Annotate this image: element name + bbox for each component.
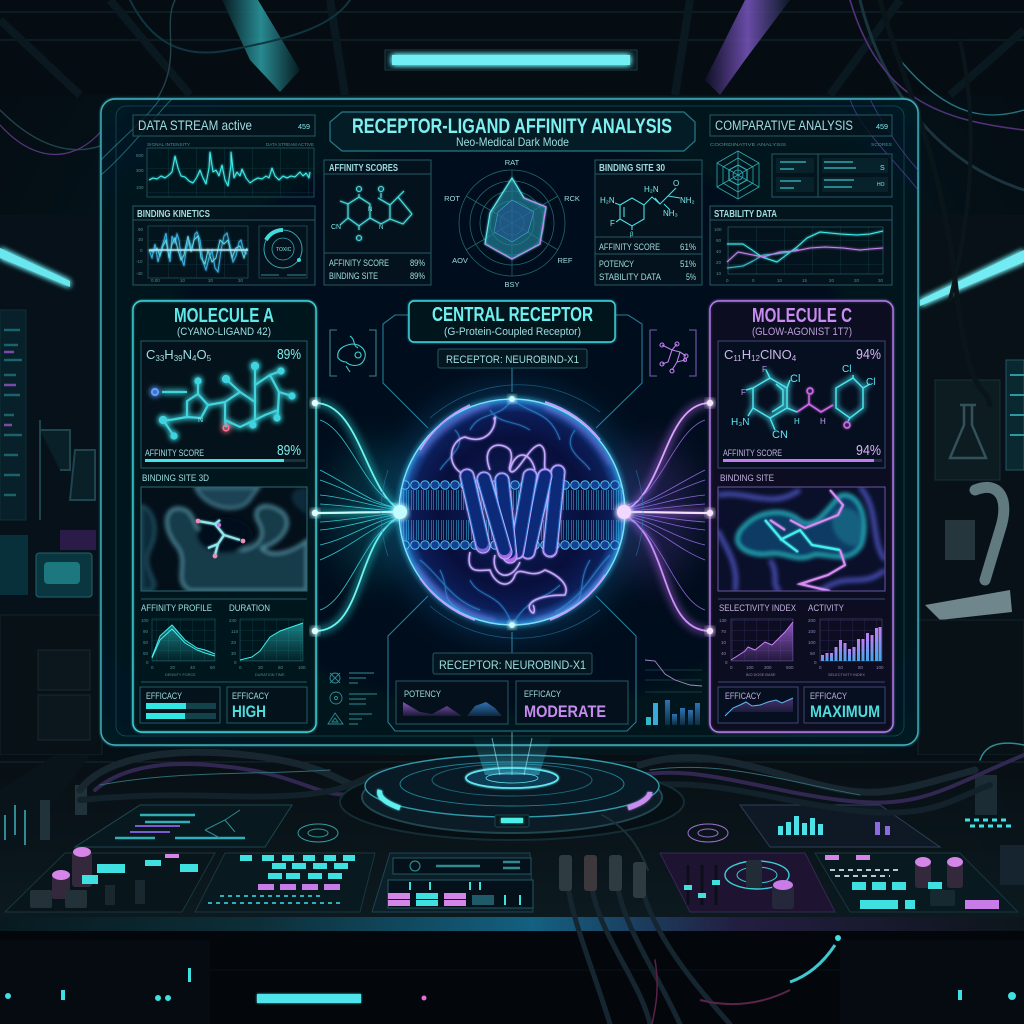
- panel: stability data: 0: [752, 278, 755, 283]
- molecule C structure box: 94%: [856, 442, 881, 459]
- lipid bilayer: [399, 480, 625, 550]
- panel: binding site 3D: NH₃: [663, 209, 678, 218]
- molecule C structure box: H: [820, 417, 826, 426]
- molecule A structure box: 89%: [277, 346, 301, 363]
- activity bar chart: 200: [808, 618, 816, 623]
- panel: stability data: 20: [829, 278, 835, 283]
- receptor label bottom: RECEPTOR: NEUROBIND-X1: [439, 658, 586, 672]
- molecule C structure box: Cl: [790, 373, 800, 385]
- efficacy high box: HIGH: [232, 702, 266, 721]
- panel: stability data: 0: [726, 278, 729, 283]
- activity bar chart: 100: [808, 629, 816, 634]
- panel: binding site 3D: STABILITY DATA: [599, 272, 661, 282]
- radar chart: BSY: [504, 280, 520, 289]
- panel: binding kinetics: 30: [238, 278, 244, 283]
- molecule A subtitle: (CYANO-LIGAND 42): [177, 326, 271, 338]
- console cables: [80, 743, 1024, 813]
- selectivity index chart: 300: [764, 665, 772, 670]
- hologram base platform: [340, 755, 684, 840]
- panel: stability data: 10: [716, 271, 722, 276]
- efficacy bars box: [140, 687, 220, 723]
- molecule C structure box: Cl: [866, 377, 875, 388]
- molecule A heading: MOLECULE A: [174, 305, 274, 327]
- panel: binding kinetics: 10: [180, 278, 186, 283]
- main holographic dashboard frame: [101, 99, 918, 745]
- hologram light beam: [472, 732, 552, 775]
- affinity profile chart: 90: [143, 629, 149, 634]
- duration chart: 30: [231, 651, 237, 656]
- console control panel: left: [5, 847, 215, 912]
- activity bar chart: [808, 603, 884, 677]
- icon: molecule purple: [650, 330, 696, 376]
- panel: stability data: 90: [716, 238, 722, 243]
- molecule C structure box: H₃N: [731, 417, 750, 428]
- ceiling with pipes and light: [0, 0, 1024, 190]
- duration chart: 0: [239, 665, 242, 670]
- mini radar: [717, 151, 759, 199]
- data stream heading: DATA STREAM active: [138, 117, 252, 133]
- molecule diagram: [340, 186, 412, 240]
- panel: data stream: DATA STREAM ACTIVE: [266, 142, 314, 147]
- molecule A structure box: O: [196, 347, 207, 362]
- molecule C structure box: F: [762, 365, 767, 374]
- molecule C structure box: Cl: [842, 364, 851, 375]
- panel: molecule C: [710, 301, 893, 732]
- duration chart: 30: [258, 665, 264, 670]
- affinity profile chart: AFFINITY PROFILE: [141, 603, 212, 614]
- binding kinetics heading: BINDING KINETICS: [137, 209, 210, 220]
- panel: stability data: 100: [714, 227, 722, 232]
- molecule A diagram: [152, 363, 294, 438]
- selectivity index chart: [719, 603, 797, 677]
- molecule C structure box: H: [794, 417, 800, 426]
- molecule A structure box: 4: [192, 354, 197, 363]
- panel: binding kinetics: 90: [138, 227, 144, 232]
- activity bar chart: SELECTIVITY INDEX: [828, 673, 865, 677]
- stability heading: STABILITY DATA: [714, 209, 777, 220]
- efficacy moderate box: EFFICACY: [524, 689, 561, 699]
- receptor label top: RECEPTOR: NEUROBIND-X1: [446, 354, 579, 366]
- selectivity index chart: 100: [746, 665, 754, 670]
- molecule C structure box: 12: [751, 354, 761, 363]
- potency box: [396, 681, 508, 724]
- binding site surface render: [718, 487, 885, 591]
- comparison mini table: [772, 154, 892, 197]
- selectivity index chart: 500: [786, 665, 794, 670]
- affinity profile chart: 50: [143, 651, 149, 656]
- panel: data stream: [133, 115, 315, 197]
- neural veins: [420, 399, 610, 625]
- duration chart: 20: [231, 640, 237, 645]
- panel: binding kinetics: 0.00: [151, 278, 160, 283]
- panel: stability data: 20: [854, 278, 860, 283]
- molecule C diagram: [746, 370, 870, 430]
- panel: comparative analysis: SCORES: [871, 142, 892, 147]
- connection streams: purple from molecule C: [615, 400, 713, 634]
- console control panel: right keypad: [815, 853, 1018, 912]
- panel: data stream: 459: [298, 122, 310, 131]
- side console modules: [0, 755, 1024, 885]
- molecule C structure box: [718, 341, 885, 468]
- molecule C structure box: C: [724, 347, 733, 362]
- console control panel: right purple: [660, 853, 835, 912]
- selectivity index chart: 130: [719, 618, 727, 623]
- binding site label: BINDING SITE 3D: [142, 473, 209, 484]
- efficacy maximum box: [804, 687, 885, 723]
- central receptor subtitle: (G-Protein-Coupled Receptor): [444, 326, 581, 338]
- panel: binding site 3D: H₂N: [644, 185, 659, 194]
- molecule C structure box: F: [741, 388, 746, 397]
- panel: binding kinetics: -40: [136, 271, 143, 276]
- activity bar chart: 100: [808, 640, 816, 645]
- affinity profile chart: 40: [190, 665, 196, 670]
- molecule C heading: MOLECULE C: [752, 305, 852, 327]
- affinity profile chart: 0: [146, 660, 149, 665]
- right side lab equipment: [880, 0, 1024, 755]
- central receptor frame lines: [383, 315, 642, 731]
- affinity profile chart: [141, 603, 216, 677]
- affinity profile chart: DENSITY FORCE: [165, 673, 196, 677]
- radar chart: AOV: [452, 256, 468, 265]
- molecule C structure box: H: [742, 347, 751, 362]
- panel: binding site 3D: NH₂: [680, 196, 695, 205]
- radar chart: RAT: [505, 158, 520, 167]
- panel: stability data: [710, 206, 892, 285]
- molecule A structure box: [141, 341, 307, 468]
- panel: binding kinetics: 0: [140, 248, 143, 253]
- panel: binding kinetics: 30: [138, 237, 144, 242]
- selectivity index chart: SELECTIVITY INDEX: [719, 603, 797, 614]
- selectivity index chart: 0: [730, 665, 733, 670]
- console screen: left: [75, 805, 292, 847]
- panel: affinity scores: [324, 160, 431, 285]
- title banner: [330, 112, 695, 151]
- affinity profile chart: 100: [141, 618, 149, 623]
- mini bar chart: [646, 700, 700, 725]
- binding site label: BINDING SITE: [720, 473, 774, 484]
- panel: stability data: 10: [777, 278, 783, 283]
- icon: brain and stethoscope: [330, 330, 376, 376]
- molecule C structure box: 4: [792, 354, 797, 363]
- efficacy high box: [227, 687, 307, 723]
- selectivity index chart: BIO DOSE BASE: [746, 673, 776, 677]
- mini trend lines: [645, 660, 702, 692]
- activity bar chart: ACTIVITY: [808, 603, 845, 614]
- molecule A structure box: 33: [155, 354, 165, 363]
- duration chart: 60: [278, 665, 284, 670]
- duration chart: 0: [234, 660, 237, 665]
- kinetics chart: [149, 232, 248, 272]
- comparison mini table: HO: [877, 182, 885, 188]
- panel: binding kinetics: [133, 206, 315, 285]
- central receptor title: CENTRAL RECEPTOR: [432, 304, 593, 326]
- activity bar chart: 50: [838, 665, 844, 670]
- affinity profile chart: 0: [151, 665, 154, 670]
- panel: stability data: 30: [878, 278, 884, 283]
- duration chart: DURATION: [229, 603, 270, 614]
- activity bar chart: 50: [810, 651, 816, 656]
- panel: binding site 3D: F: [610, 219, 615, 228]
- molecule C structure box: 94%: [856, 346, 881, 363]
- central cable bundle: [559, 815, 730, 1024]
- duration chart: [229, 603, 306, 677]
- console control panel: keypad: [195, 853, 375, 912]
- efficacy maximum box: EFFICACY: [810, 691, 848, 702]
- central receptor sphere: [381, 385, 643, 638]
- panel: data stream: 100: [136, 185, 144, 190]
- molecule A structure box: 5: [207, 354, 212, 363]
- radar chart: ROT: [444, 194, 460, 203]
- molecule A structure box: N: [198, 417, 203, 424]
- activity bar chart: 0: [819, 665, 822, 670]
- receptor label bottom: [433, 653, 592, 674]
- activity bar chart: 0: [814, 660, 817, 665]
- radial gauge: [259, 226, 307, 278]
- panel: binding site 3D: [595, 160, 702, 285]
- molecule A structure box: N: [183, 347, 192, 362]
- selectivity index chart: 70: [721, 629, 727, 634]
- panel: comparative analysis: [710, 115, 892, 199]
- panel: affinity scores: AFFINITY SCORE: [329, 258, 389, 268]
- left side lab equipment: [0, 215, 102, 755]
- radar chart: RCK: [564, 194, 580, 203]
- affinity scores heading: AFFINITY SCORES: [329, 163, 398, 174]
- radar chart: REF: [558, 256, 573, 265]
- comparative heading: COMPARATIVE ANALYSIS: [715, 118, 853, 133]
- panel: binding site 3D: AFFINITY SCORE: [599, 242, 660, 252]
- title text: RECEPTOR-LIGAND AFFINITY ANALYSIS: [352, 115, 672, 138]
- panel: comparative analysis: 459: [876, 122, 888, 131]
- panel: binding site 3D: 5%: [686, 272, 696, 282]
- duration chart: 100: [298, 665, 306, 670]
- panel: affinity scores: N: [379, 225, 383, 231]
- efficacy moderate box: [516, 681, 628, 724]
- connection streams: cyan from molecule A: [312, 400, 412, 634]
- transmembrane helices: [467, 472, 558, 556]
- selectivity index chart: 10: [721, 640, 727, 645]
- comparison mini table: S: [880, 165, 885, 172]
- panel: binding kinetics: 30: [208, 278, 214, 283]
- panel: stability data: 40: [716, 249, 722, 254]
- panel: stability data: 15: [802, 278, 808, 283]
- small status icons: [328, 673, 377, 724]
- small console dials: [298, 824, 728, 842]
- radar chart: [444, 158, 580, 289]
- selectivity index chart: 40: [721, 651, 727, 656]
- panel: affinity scores: 89%: [410, 271, 425, 281]
- panel: affinity scores: 89%: [410, 258, 425, 268]
- stability lines: [727, 231, 883, 268]
- molecule A structure box: C: [146, 347, 155, 362]
- activity bar chart: 80: [858, 665, 864, 670]
- duration chart: 240: [229, 618, 237, 623]
- panel: binding site 3D: 61%: [680, 242, 696, 252]
- binding site heading: BINDING SITE 30: [599, 163, 665, 174]
- selectivity index chart: 0: [725, 660, 728, 665]
- radial gauge: TOXIC: [276, 247, 292, 253]
- panel: data stream: 500: [136, 153, 144, 158]
- panel: binding site 3D: β: [630, 232, 634, 238]
- duration chart: 110: [231, 629, 239, 634]
- loops: [451, 417, 566, 613]
- panel: affinity scores: BINDING SITE: [329, 271, 378, 281]
- data stream line chart: [149, 152, 310, 186]
- console screen: right: [740, 805, 940, 847]
- molecule A structure box: AFFINITY SCORE: [145, 448, 204, 458]
- binding site 3D surface render: [141, 487, 307, 591]
- panel: data stream: SIGNAL INTENSITY: [147, 142, 190, 147]
- efficacy maximum box: MAXIMUM: [810, 702, 880, 721]
- central receptor heading box: [409, 301, 615, 342]
- molecule A structure box: H: [164, 347, 174, 362]
- subtitle: Neo-Medical Dark Mode: [456, 135, 569, 149]
- efficacy moderate box: MODERATE: [524, 702, 606, 721]
- molecule diagram: [615, 188, 680, 230]
- affinity profile chart: 20: [170, 665, 176, 670]
- panel: binding site 3D: O: [673, 179, 679, 188]
- panel: binding site 3D: H₂N: [600, 196, 615, 205]
- efficacy bars box: EFFICACY: [146, 691, 183, 702]
- console control panel: center: [372, 853, 533, 912]
- lower console hardware: [0, 935, 1024, 1024]
- duration chart: DURATION TIME: [255, 673, 285, 677]
- affinity profile chart: 50: [143, 640, 149, 645]
- molecule C structure box: 11: [733, 354, 742, 363]
- molecule A structure box: 39: [174, 354, 183, 363]
- panel: affinity scores: CN: [331, 224, 341, 231]
- panel: stability data: 20: [716, 260, 722, 265]
- panel: data stream: 300: [136, 168, 144, 173]
- molecule C structure box: CN: [772, 429, 788, 441]
- molecule C structure box: AFFINITY SCORE: [723, 448, 782, 458]
- potency box: POTENCY: [404, 689, 441, 699]
- efficacy sparkline box: EFFICACY: [725, 691, 762, 702]
- panel: binding site 3D: POTENCY: [599, 259, 634, 269]
- receptor label top: [438, 349, 587, 368]
- panel: affinity scores: N: [368, 207, 372, 213]
- activity bar chart: 100: [876, 665, 884, 670]
- molecule C subtitle: (GLOW-AGONIST 1T7): [752, 326, 852, 338]
- panel: binding site 3D: 51%: [680, 259, 696, 269]
- efficacy sparkline box: [718, 687, 798, 723]
- molecule C structure box: ClNO: [760, 347, 792, 362]
- panel: molecule A: [133, 301, 316, 732]
- molecule A structure box: 89%: [277, 442, 301, 459]
- console deck: [0, 755, 1024, 1024]
- panel: binding kinetics: -10: [136, 259, 143, 264]
- efficacy high box: EFFICACY: [232, 691, 270, 702]
- panel: comparative analysis: COORDINATIVE ANALYSIS: [710, 142, 786, 147]
- affinity profile chart: 60: [210, 665, 216, 670]
